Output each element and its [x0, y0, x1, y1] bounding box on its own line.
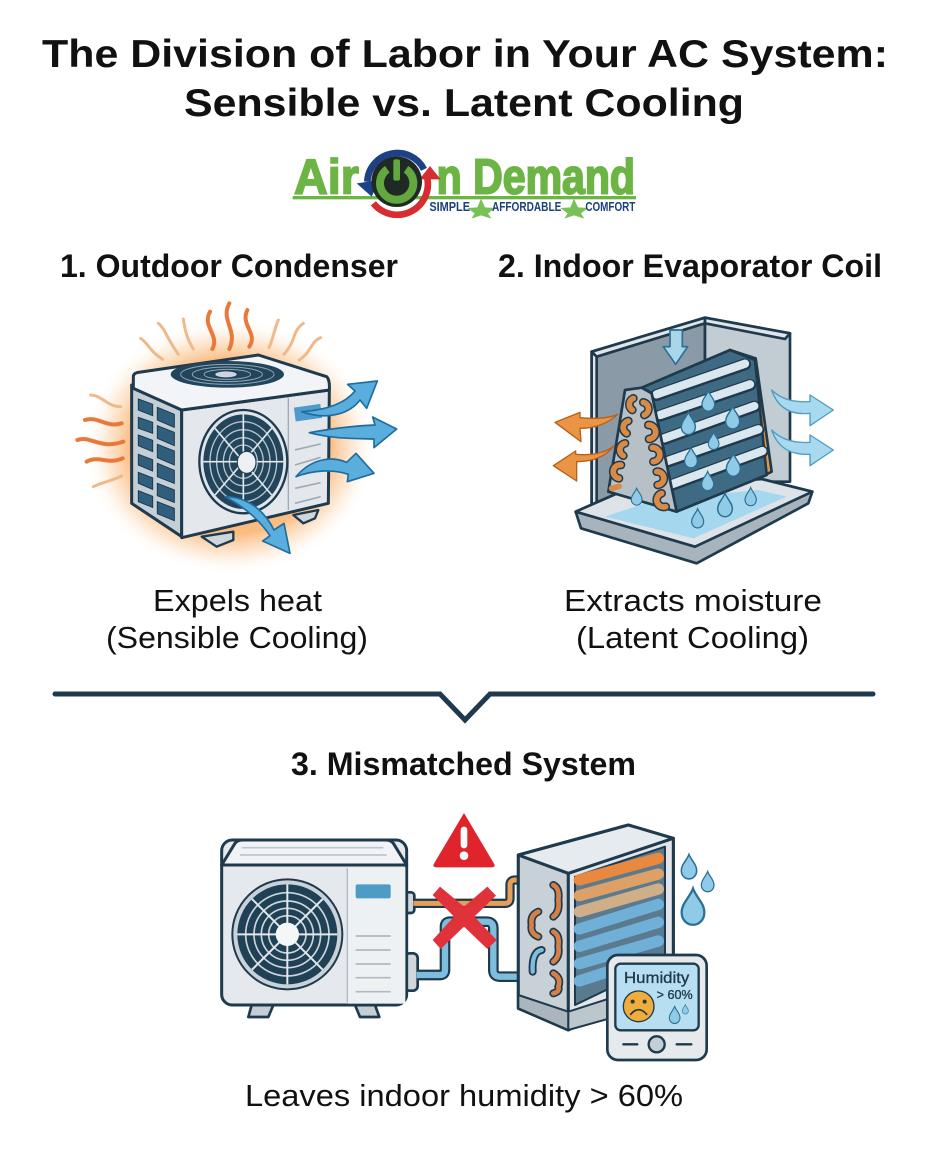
- illustration: mismatched system: [222, 813, 714, 1060]
- title: [42, 33, 888, 125]
- logo: Air On Demand: n Demand: [437, 149, 635, 204]
- illustration: outdoor condenser: [77, 303, 397, 575]
- text: expels heat: [106, 583, 368, 655]
- coil tubes: [579, 858, 658, 981]
- text: expels heat: Expels heat: [153, 583, 322, 618]
- logo: Air On Demand: [293, 149, 636, 219]
- coil side plate: [608, 388, 677, 512]
- copper bends: [613, 398, 666, 507]
- vent lines: [356, 936, 391, 992]
- refrigerant lines: [413, 874, 548, 983]
- illustration: indoor evaporator coil: [553, 318, 833, 563]
- outdoor unit casing: [222, 840, 407, 1005]
- divider with chevron: [55, 694, 873, 720]
- back wall panels: [592, 318, 790, 515]
- title: The Division of Labor in Your AC System:: [42, 33, 888, 76]
- thermostat: [607, 955, 707, 1060]
- text: humidity consequence: Leaves indoor humidity > 60%: [245, 1078, 683, 1113]
- heat waves: [77, 303, 321, 487]
- airflow arrows: [225, 381, 397, 553]
- humidity drops: [681, 854, 714, 925]
- heading: outdoor condenser: 1. Outdoor Condenser: [60, 248, 398, 284]
- outdoor unit feet: [248, 1005, 379, 1017]
- side panel lines: [286, 398, 290, 510]
- logo: Air On Demand: SIMPLE: [429, 199, 470, 214]
- thermostat: > 60%: [657, 988, 693, 1002]
- drain pan: [576, 479, 812, 563]
- heat glow: [83, 318, 377, 575]
- red X: [433, 887, 497, 949]
- warning triangle: [433, 813, 495, 867]
- water drops: [631, 391, 756, 528]
- coil tubes: [657, 364, 762, 485]
- pipe stubs: [405, 892, 418, 991]
- outdoor fan: [232, 879, 342, 989]
- text: extracts moisture: (Latent Cooling): [576, 620, 809, 655]
- text: extracts moisture: [564, 583, 822, 655]
- text: extracts moisture: Extracts moisture: [564, 583, 822, 618]
- title: Sensible vs. Latent Cooling: [184, 82, 744, 125]
- feet: [202, 510, 318, 547]
- cool air arrows: [772, 390, 833, 466]
- heading: indoor evaporator coil: 2. Indoor Evaporator Coil: [498, 248, 882, 284]
- logo: Air On Demand: Air: [294, 149, 359, 204]
- air in arrow: [663, 330, 688, 364]
- unit casing: [132, 355, 329, 538]
- text: expels heat: (Sensible Cooling): [106, 620, 368, 655]
- outdoor unit display: [356, 884, 391, 898]
- thermostat: Humidity: [624, 970, 690, 987]
- coil casing: [518, 825, 673, 1030]
- side louvers: [138, 399, 174, 521]
- heading: mismatched system: 3. Mismatched System: [291, 746, 636, 782]
- front fan: [199, 410, 287, 513]
- top fan: [171, 361, 284, 388]
- warm air arrows: [553, 412, 618, 481]
- logo: Air On Demand: COMFORT: [585, 199, 635, 214]
- coil front: [642, 350, 772, 512]
- logo: Air On Demand: AFFORDABLE: [492, 199, 561, 214]
- coil copper bends: [531, 885, 559, 993]
